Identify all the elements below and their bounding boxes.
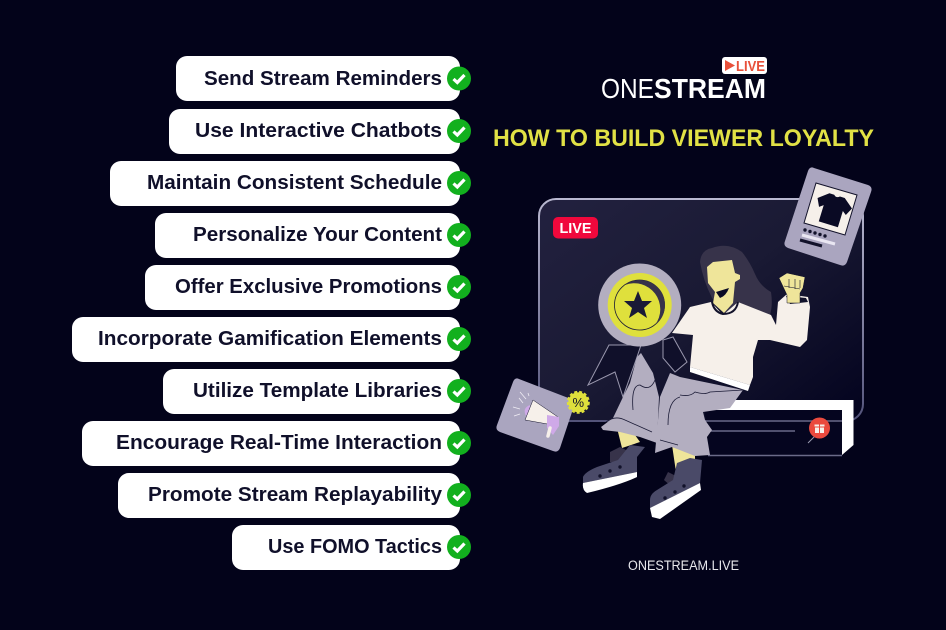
item: Encourage Real-Time Interaction: Encourage Real-Time Interaction [116,432,442,454]
logo badge: LIVE: LIVE [736,58,765,75]
left pant leg [601,353,659,443]
item: Personalize Your Content [155,213,471,258]
left shoe [583,445,645,493]
discount badge: % [573,395,585,410]
item: Utilize Template Libraries [163,369,471,414]
right shoe [650,458,702,519]
sweater [672,294,810,385]
live badge: LIVE [560,220,592,237]
ankles [617,428,695,472]
live badge [553,217,598,238]
item: Maintain Consistent Schedule [110,161,471,206]
cuff [786,296,808,304]
t-shirt product card [784,167,872,266]
pants fold lines [606,380,743,445]
logo wordmark: ONE: ONE [601,73,654,104]
item: Promote Stream Replayability [118,473,471,518]
right pant leg [655,373,743,456]
collar [712,302,738,314]
item: Use Interactive Chatbots [169,109,471,154]
item: Send Stream Reminders: Send Stream Reminders [204,68,442,90]
item: Use FOMO Tactics [232,525,471,570]
neck and face [707,260,740,313]
video frame [539,199,863,421]
illustration [496,167,872,519]
item: Incorporate Gamification Elements [72,317,471,362]
bench box [705,400,854,456]
megaphone card [496,378,589,452]
character [583,246,810,519]
checklist [72,56,471,570]
ribbon [588,337,687,397]
gift icon [808,418,830,443]
item: Use Interactive Chatbots: Use Interactive Chatbots [195,120,442,142]
item: Encourage Real-Time Interaction [82,421,471,466]
sweater hem [690,367,750,391]
item: Promote Stream Replayability: Promote Stream Replayability [148,484,443,506]
item: Offer Exclusive Promotions [145,265,471,310]
item: Use FOMO Tactics: Use FOMO Tactics [268,536,442,558]
logo wordmark: STREAM: STREAM [654,73,766,104]
hair [700,246,772,315]
medal [598,264,681,346]
megaphone icon [513,392,559,436]
item: Utilize Template Libraries: Utilize Template Libraries [193,380,442,402]
title: HOW TO BUILD VIEWER LOYALTY [493,125,874,152]
raised fist [779,273,805,303]
item: Personalize Your Content: Personalize Your Content [193,224,442,246]
mouth [716,288,729,298]
footer url: ONESTREAM.LIVE [628,558,739,573]
item: Incorporate Gamification Elements: Incorporate Gamification Elements [98,328,442,350]
item: Send Stream Reminders [176,56,471,101]
logo [601,57,767,104]
logo badge: LIVE [722,57,767,75]
item: Maintain Consistent Schedule: Maintain Consistent Schedule [147,172,442,194]
item: Offer Exclusive Promotions: Offer Exclusive Promotions [175,276,442,298]
